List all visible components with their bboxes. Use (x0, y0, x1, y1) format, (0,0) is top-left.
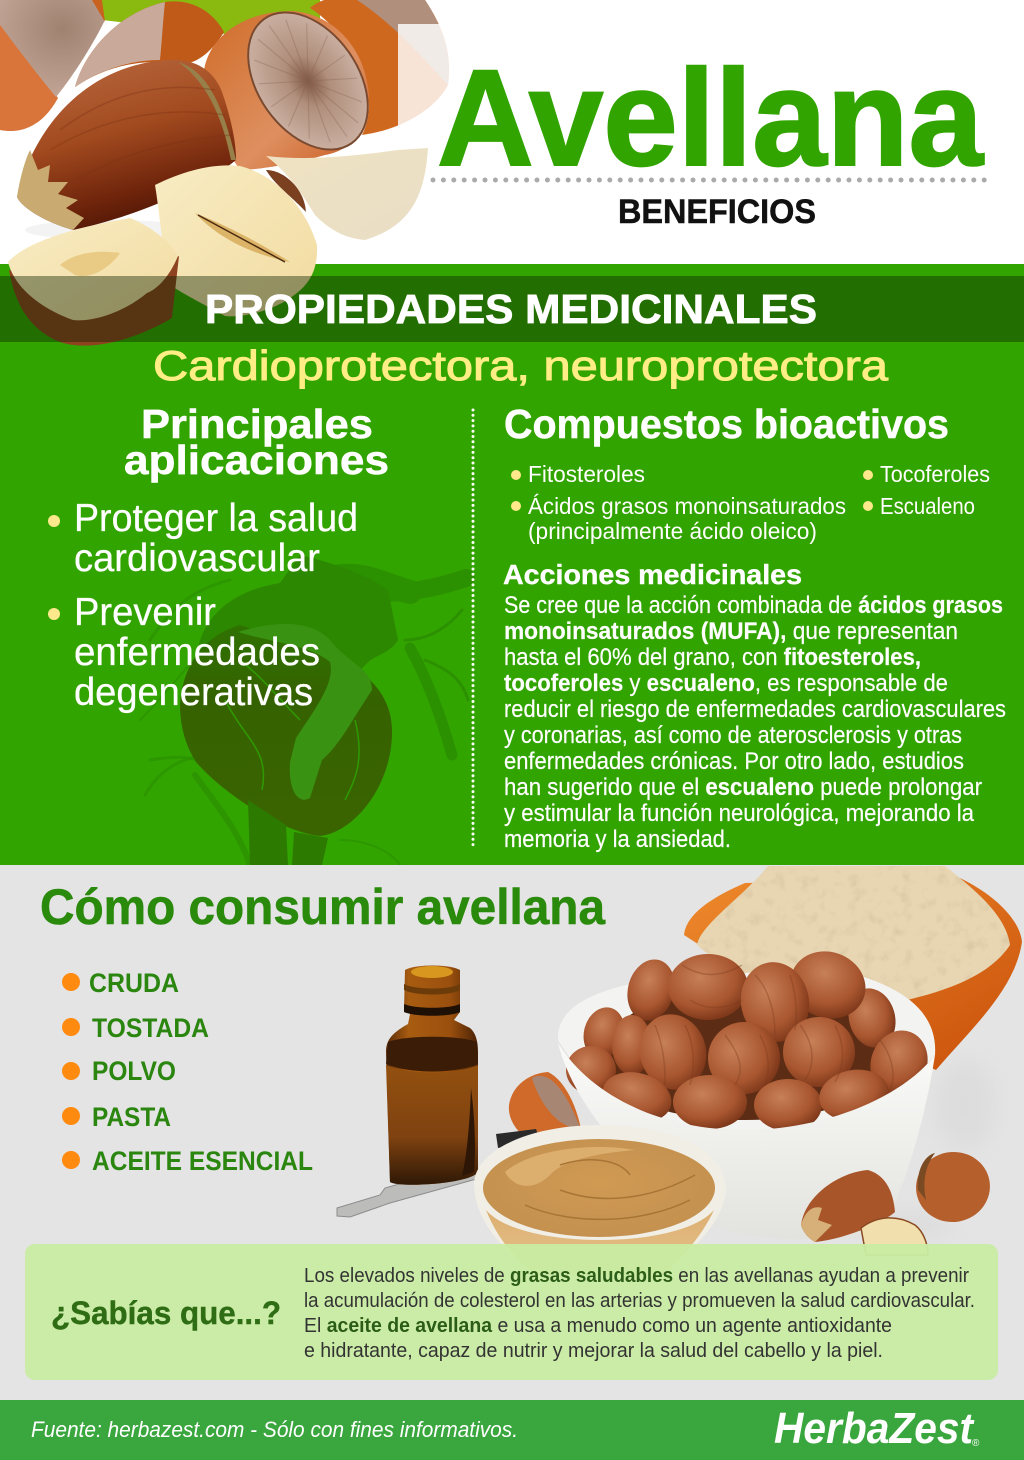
dotted rule (433, 178, 994, 182)
bowl interior (558, 970, 935, 1130)
kernel: middle (155, 165, 317, 316)
illustration: heart background (140, 555, 468, 865)
photo: hazelnut paste in glass bowl (474, 1125, 726, 1275)
nut with pale tip (801, 1170, 895, 1242)
nut: big brown (17, 60, 236, 240)
photo: hazelnuts group (0, 0, 458, 346)
bottle reflection (462, 1088, 475, 1176)
list: compuestos: Ácidos grasos monoinsaturados (528, 493, 846, 519)
title: Avellana (437, 42, 985, 195)
list: forms of consumption: ACEITE ESENCIAL (92, 1146, 313, 1176)
text block: acciones medicinales: tocoferoles y escualeno, es responsable de (504, 670, 948, 697)
photo: hazelnut beside bowl (509, 1072, 582, 1135)
list: compuestos: (principalmente ácido oleico) (528, 518, 817, 544)
list: aplicaciones: Proteger la salud (74, 497, 358, 540)
text block: acciones medicinales: han sugerido que el escualeno puede prolongar (504, 774, 982, 801)
bowl front (558, 1043, 935, 1240)
kernel: front left (8, 218, 179, 346)
band: dark heading background (0, 276, 1024, 342)
round nut (910, 1146, 996, 1228)
text block: acciones medicinales: memoria y la ansiedad. (504, 826, 731, 853)
heading: compuestos bioactivos: Compuestos bioactivos (504, 401, 949, 447)
hazelnuts in bowl (566, 941, 937, 1131)
nut: large orange with scar (203, 0, 394, 173)
list: aplicaciones: Prevenir (74, 591, 216, 634)
text block: acciones medicinales: Se cree que la acción combinada de ácidos grasos (504, 592, 1003, 619)
footer (0, 1400, 1024, 1460)
subheading: cardioprotectora: Cardioprotectora, neuroprotectora (153, 342, 889, 389)
text block: acciones medicinales: hasta el 60% del grano, con fitoesteroles, (504, 644, 921, 671)
heading: principales aplicaciones: Principales (141, 401, 373, 447)
callout: sabias que (25, 1244, 998, 1380)
text block: acciones medicinales: enfermedades crónicas. Por otro lado, estudios (504, 748, 964, 775)
nut skin lines (655, 965, 893, 1090)
source text: Fuente: herbazest.com - Sólo con fines informativos. (31, 1417, 518, 1442)
heart lighter muscle (238, 624, 372, 800)
callout text: El aceite de avellana e usa a menudo como un agente antioxidante (304, 1314, 892, 1337)
logo: HerbaZest: HerbaZest (774, 1404, 975, 1453)
callout heading: ¿Sabías que...? (51, 1295, 281, 1331)
list: compuestos: Escualeno (880, 493, 975, 519)
heading: como consumir: Cómo consumir avellana (40, 879, 606, 935)
heart vessels (140, 576, 468, 865)
paste swirls (505, 1147, 635, 1186)
registered mark: ® (972, 1438, 980, 1449)
callout text: Los elevados niveles de grasas saludables en las avellanas ayudan a prevenir (304, 1264, 969, 1287)
heading: principales aplicaciones: aplicaciones (124, 437, 389, 483)
list: compuestos: Tocoferoles (880, 461, 990, 487)
streaks on nut (50, 86, 230, 150)
shadow between nuts (585, 982, 905, 1120)
list: compuestos: Fitosteroles (528, 461, 645, 487)
subtitle: BENEFICIOS (618, 193, 816, 231)
list: aplicaciones: degenerativas (74, 671, 313, 714)
nut: far right faded (310, 0, 449, 135)
heart atria (196, 555, 398, 680)
panel: how to consume (0, 865, 1024, 1400)
photo: amber oil bottle (386, 966, 478, 1185)
photo: white bowl of hazelnuts (558, 941, 937, 1240)
list: forms of consumption: PASTA (92, 1102, 171, 1132)
broken kernel (861, 1218, 928, 1255)
column divider (472, 410, 474, 848)
list: forms of consumption (62, 968, 313, 1176)
text block: acciones medicinales: y coronarias, así como de aterosclerosis y otras (504, 722, 962, 749)
text block: acciones medicinales: monoinsaturados (MUFA), que representan (504, 618, 958, 645)
text block: acciones medicinales: y estimular la función neurológica, mejorando la (504, 800, 975, 827)
leaf behind nuts (102, 0, 320, 34)
heart lower vessels (248, 800, 328, 865)
bottle ribs (404, 1004, 460, 1016)
overlay: white fade panel (398, 24, 458, 244)
panel: green medicinal properties (0, 264, 1024, 865)
list: forms of consumption: CRUDA (89, 968, 179, 998)
photo: loose hazelnuts right (801, 1146, 996, 1255)
photo: flour in wooden bowl (684, 866, 1022, 1070)
text block: acciones medicinales (504, 592, 1006, 853)
heart body (180, 625, 392, 836)
list: aplicaciones: enfermedades (74, 631, 320, 674)
list: aplicaciones: cardiovascular (74, 537, 320, 580)
callout text (304, 1264, 975, 1362)
list: forms of consumption: POLVO (92, 1056, 176, 1086)
callout text: e hidratante, capaz de nutrir y mejorar la salud del cabello y la piel. (304, 1339, 883, 1362)
photo: dropper (337, 1129, 540, 1217)
soft shadows (855, 1060, 995, 1239)
list: forms of consumption: TOSTADA (92, 1013, 209, 1043)
heading: acciones medicinales: Acciones medicinales (503, 559, 802, 590)
scar fibres (222, 0, 394, 173)
list: compuestos (511, 461, 990, 544)
callout text: la acumulación de colesterol en las arterias y promueven la salud cardiovascular. (304, 1289, 975, 1312)
heading: propiedades medicinales: PROPIEDADES MEDICINALES (205, 286, 817, 332)
bottle dark shoulder band (386, 1037, 478, 1072)
nut: back left (0, 0, 105, 131)
bottle lower liquid (386, 1065, 478, 1185)
list: aplicaciones (48, 497, 358, 714)
nut: back centre (75, 1, 224, 87)
heart arteries lines (225, 660, 359, 800)
bottle shape (386, 966, 478, 1185)
heading: principales aplicaciones (124, 401, 389, 483)
kernel: right (266, 148, 428, 240)
